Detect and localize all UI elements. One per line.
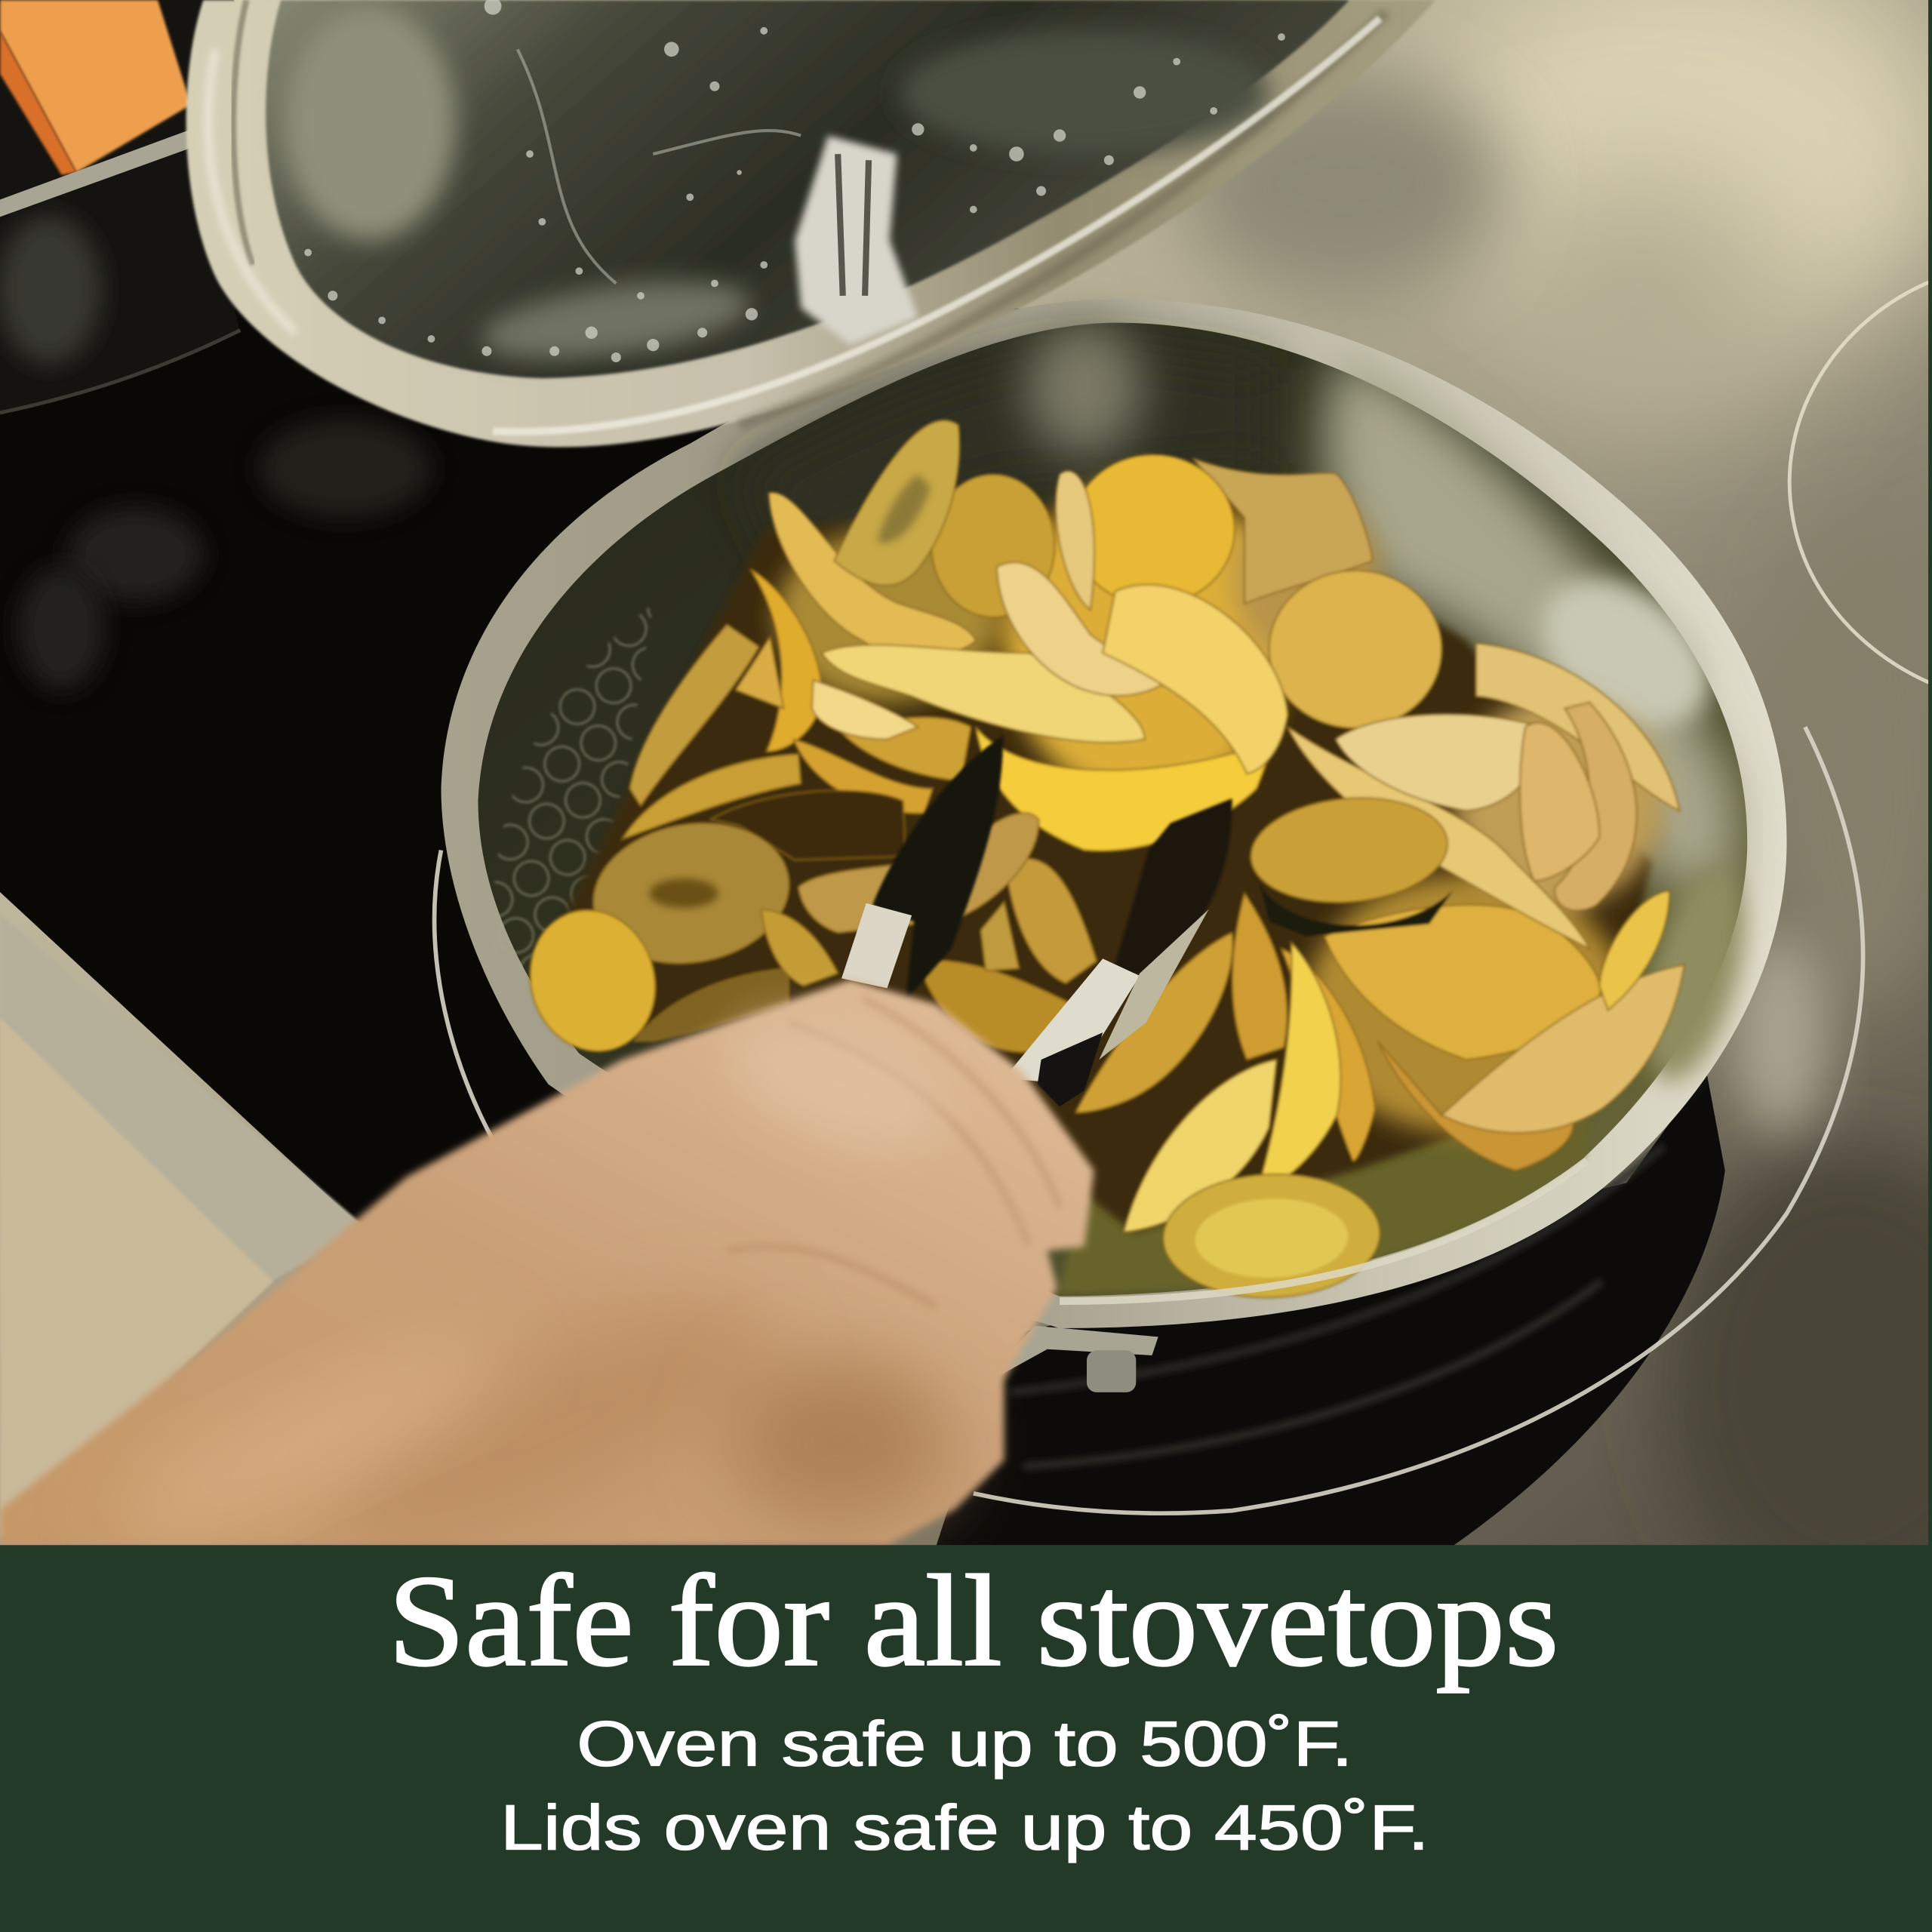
hammered pan texture xyxy=(492,604,653,986)
oven safe line: Oven safe up to 500˚F. xyxy=(577,1708,1353,1780)
oil in pan xyxy=(1060,1011,1601,1294)
salmon fillet xyxy=(0,0,191,173)
pot rim highlight xyxy=(1060,1161,1587,1301)
food base tones xyxy=(777,481,1663,1134)
lid highlight xyxy=(493,18,1380,432)
induction ring right arc xyxy=(974,727,1863,1513)
pale countertop xyxy=(0,1018,273,1540)
pan with salmon at top left xyxy=(0,0,240,413)
heading: Safe for all stovetops xyxy=(388,1549,1558,1694)
window reflection in lid xyxy=(795,136,918,345)
black glass cooktop xyxy=(0,123,1060,1232)
kitchen tongs xyxy=(841,736,1232,1106)
condensation droplets xyxy=(304,0,1285,362)
frying pan rim xyxy=(441,300,1786,1328)
caption band xyxy=(0,1545,1932,1932)
pan base xyxy=(937,1072,1725,1545)
lids safe line: Lids oven safe up to 450˚F. xyxy=(500,1792,1429,1863)
sauteed vegetables xyxy=(512,420,1684,1301)
dark back wall of pan xyxy=(740,347,1269,579)
cooktop reflections xyxy=(18,419,431,690)
photo right edge sliver xyxy=(1928,0,1932,1545)
lid inner rim shadow xyxy=(233,0,253,265)
hand holding tongs xyxy=(0,980,1094,1595)
induction ring left arc xyxy=(435,851,493,1140)
steam inside pan xyxy=(1322,351,1737,888)
frying pan interior xyxy=(478,323,1747,1297)
stainless cooktop trim xyxy=(0,914,368,1281)
lid glass xyxy=(266,0,1349,378)
pan handle rivet xyxy=(992,1326,1158,1392)
glass lid xyxy=(186,0,1435,447)
cooktop ring at right xyxy=(1789,281,1932,684)
food shadow xyxy=(555,493,1651,1232)
